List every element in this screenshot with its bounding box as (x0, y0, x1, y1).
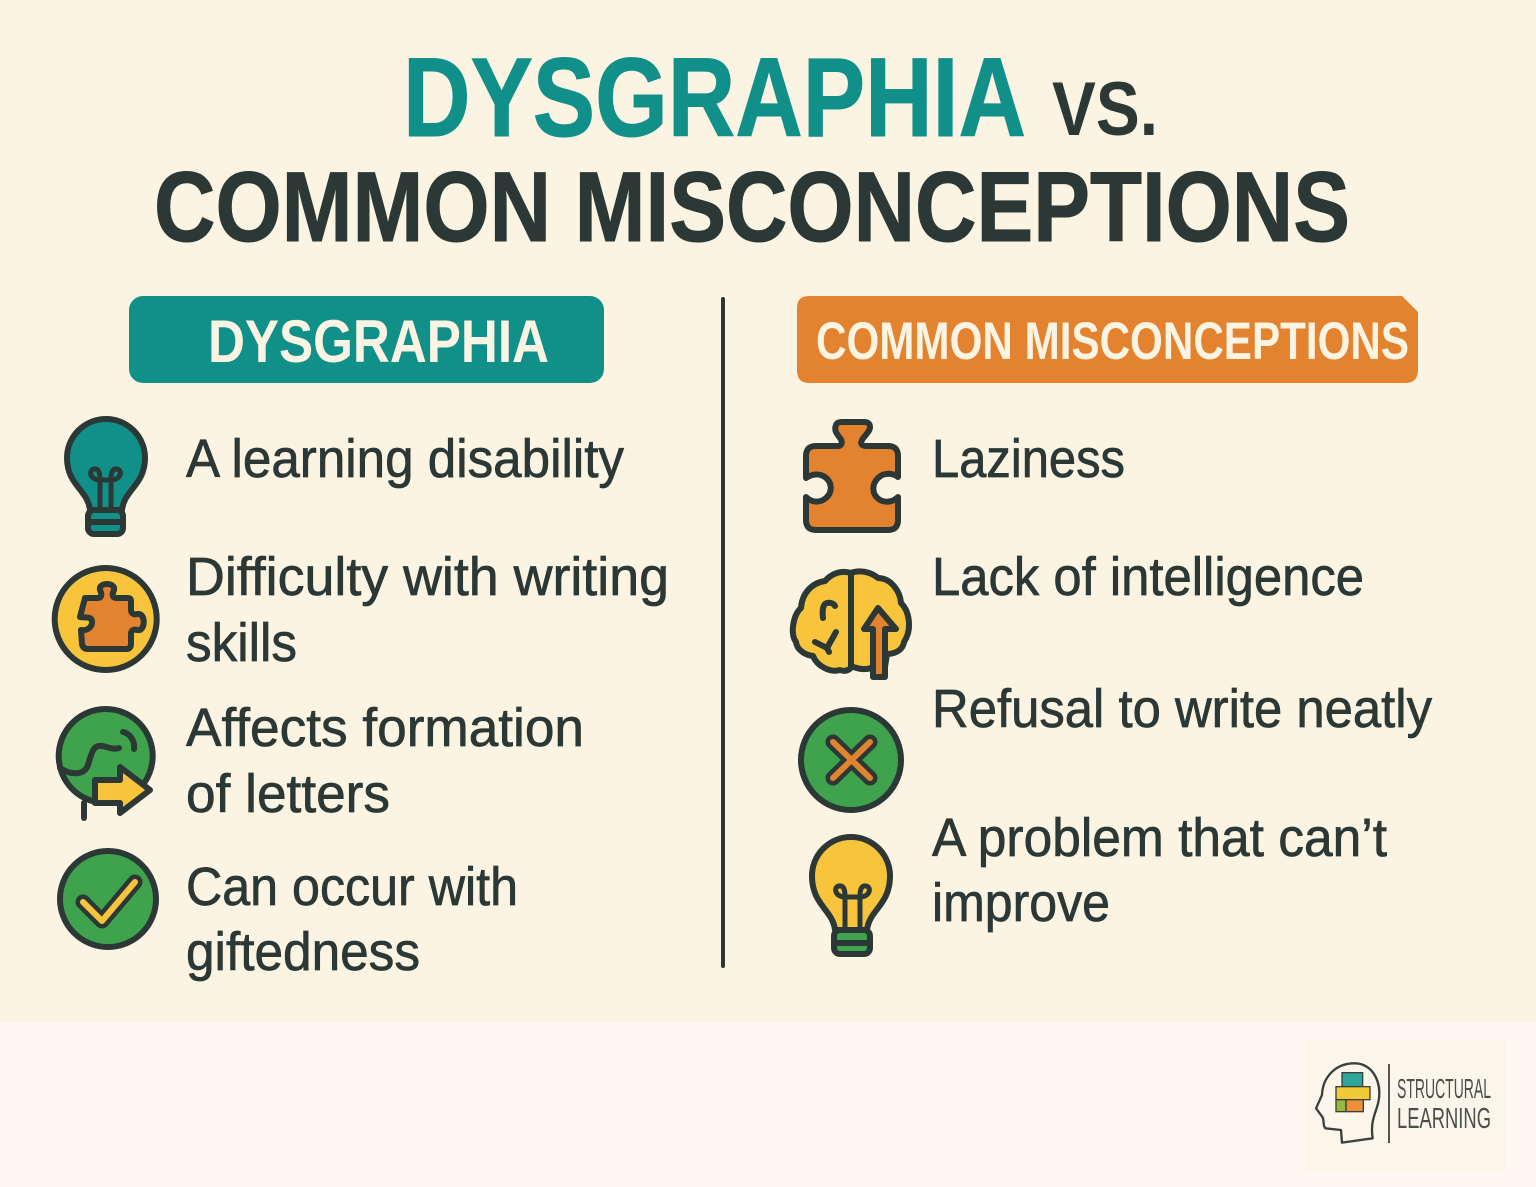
icon: puzzle in yellow circle (55, 568, 157, 670)
text: lack of intelligence: Lack of intelligence (932, 547, 1364, 607)
icon: orange puzzle piece (806, 422, 898, 530)
text: a problem that can't improve (932, 808, 1387, 933)
center divider (721, 297, 725, 968)
title (154, 35, 1350, 262)
text: difficulty with writing skills (186, 547, 669, 673)
text: a problem that can't improve: A problem that can’t (932, 808, 1387, 868)
icon: yellow light bulb (812, 837, 890, 954)
icon: green circle with squiggle and arrow (59, 709, 153, 818)
icon: green check (60, 851, 156, 947)
text: a problem that can't improve: improve (932, 873, 1110, 933)
logo: structural learning (1306, 1040, 1506, 1172)
icon: brain with arrow (793, 571, 909, 677)
text: difficulty with writing skills: skills (186, 613, 297, 673)
panel: common misconceptions (793, 296, 1432, 954)
text: laziness: Laziness (932, 429, 1125, 489)
icon: teal light bulb (67, 419, 145, 534)
text: can occur with giftedness: Can occur with (186, 857, 518, 917)
heading: common misconceptions (797, 296, 1418, 383)
text: affects formation of letters (186, 698, 584, 824)
text: difficulty with writing skills: Difficulty with writing (186, 547, 669, 607)
title: DYSGRAPHIA (403, 35, 1026, 160)
panel: dysgraphia (55, 296, 669, 982)
heading: dysgraphia: DYSGRAPHIA (208, 308, 549, 375)
title: COMMON MISCONCEPTIONS (154, 151, 1350, 262)
text: refusal to write neatly: Refusal to write neatly (932, 679, 1432, 739)
icon: head with blocks (1316, 1063, 1379, 1143)
text: can occur with giftedness: giftedness (186, 922, 420, 982)
text: affects formation of letters: of letters (186, 764, 390, 824)
text: affects formation of letters: Affects formation (186, 698, 584, 758)
text: a learning disability: A learning disability (186, 429, 624, 489)
text: can occur with giftedness (186, 857, 518, 982)
heading: dysgraphia (129, 296, 604, 383)
icon: green x (801, 710, 901, 810)
title: VS. (1052, 67, 1158, 152)
